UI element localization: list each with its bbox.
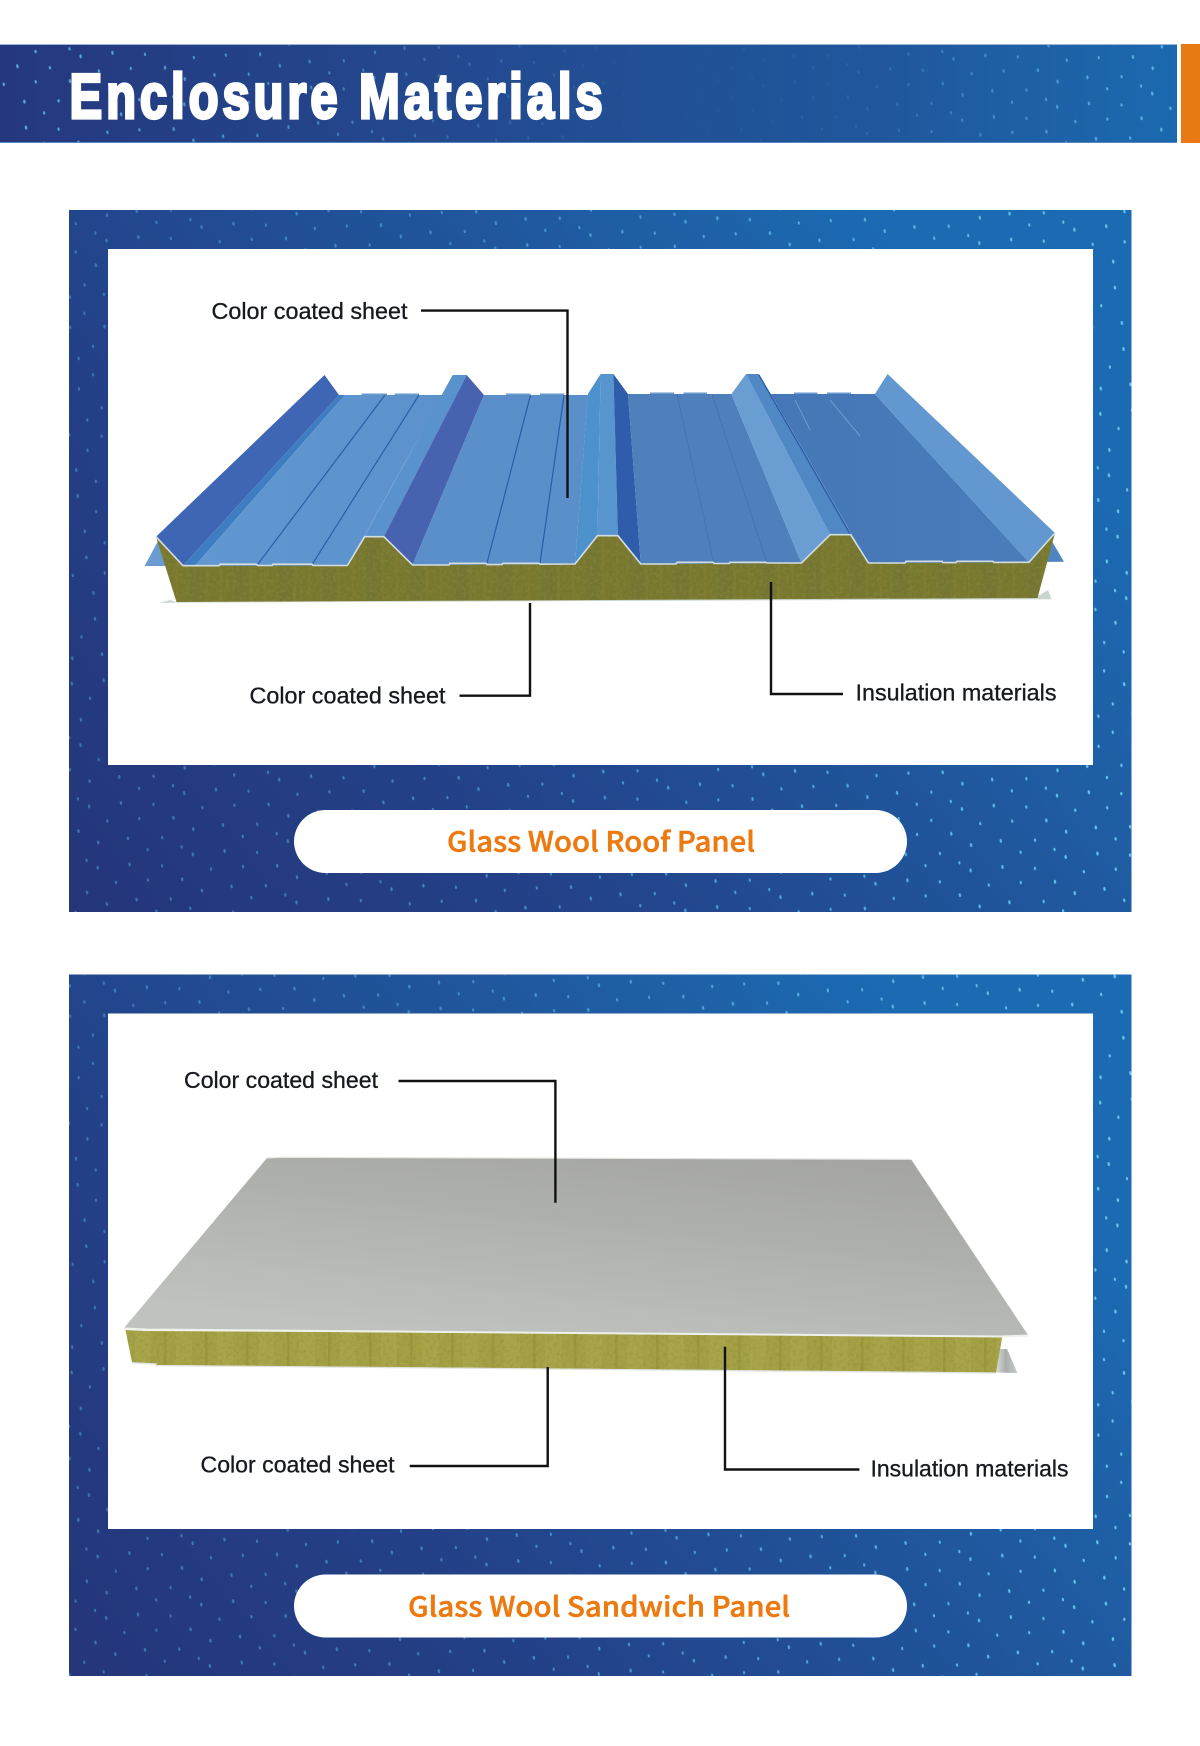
callout: bottom color coated sheet [200, 1367, 548, 1478]
callout: insulation materials: Insulation materials [856, 680, 1056, 706]
caption pill: sandwich panel [294, 1574, 907, 1638]
sandwich panel illustration [124, 1157, 1028, 1373]
caption pill: roof panel: Glass Wool Roof Panel [447, 820, 755, 860]
orange accent block [1181, 44, 1200, 143]
callout: insulation materials [771, 582, 1056, 706]
callout: top color coated sheet: Color coated sheet [212, 298, 408, 324]
callout: top color coated sheet [212, 298, 568, 498]
panel: glass wool sandwich panel [69, 974, 1132, 1676]
callout: bottom color coated sheet: Color coated sheet [200, 1452, 395, 1478]
panel: glass wool roof panel [69, 210, 1132, 912]
callout: insulation materials [725, 1347, 1068, 1482]
header banner [0, 44, 1177, 143]
caption pill: roof panel [294, 810, 907, 873]
callout: top color coated sheet [184, 1067, 555, 1203]
title: Enclosure Materials [70, 62, 606, 132]
callout: bottom color coated sheet [250, 603, 530, 708]
callout: bottom color coated sheet: Color coated sheet [250, 682, 446, 708]
callout: insulation materials: Insulation materials [870, 1456, 1068, 1482]
caption pill: sandwich panel: Glass Wool Sandwich Panel [408, 1584, 790, 1624]
roof panel illustration [145, 374, 1064, 603]
callout: top color coated sheet: Color coated sheet [184, 1067, 379, 1093]
